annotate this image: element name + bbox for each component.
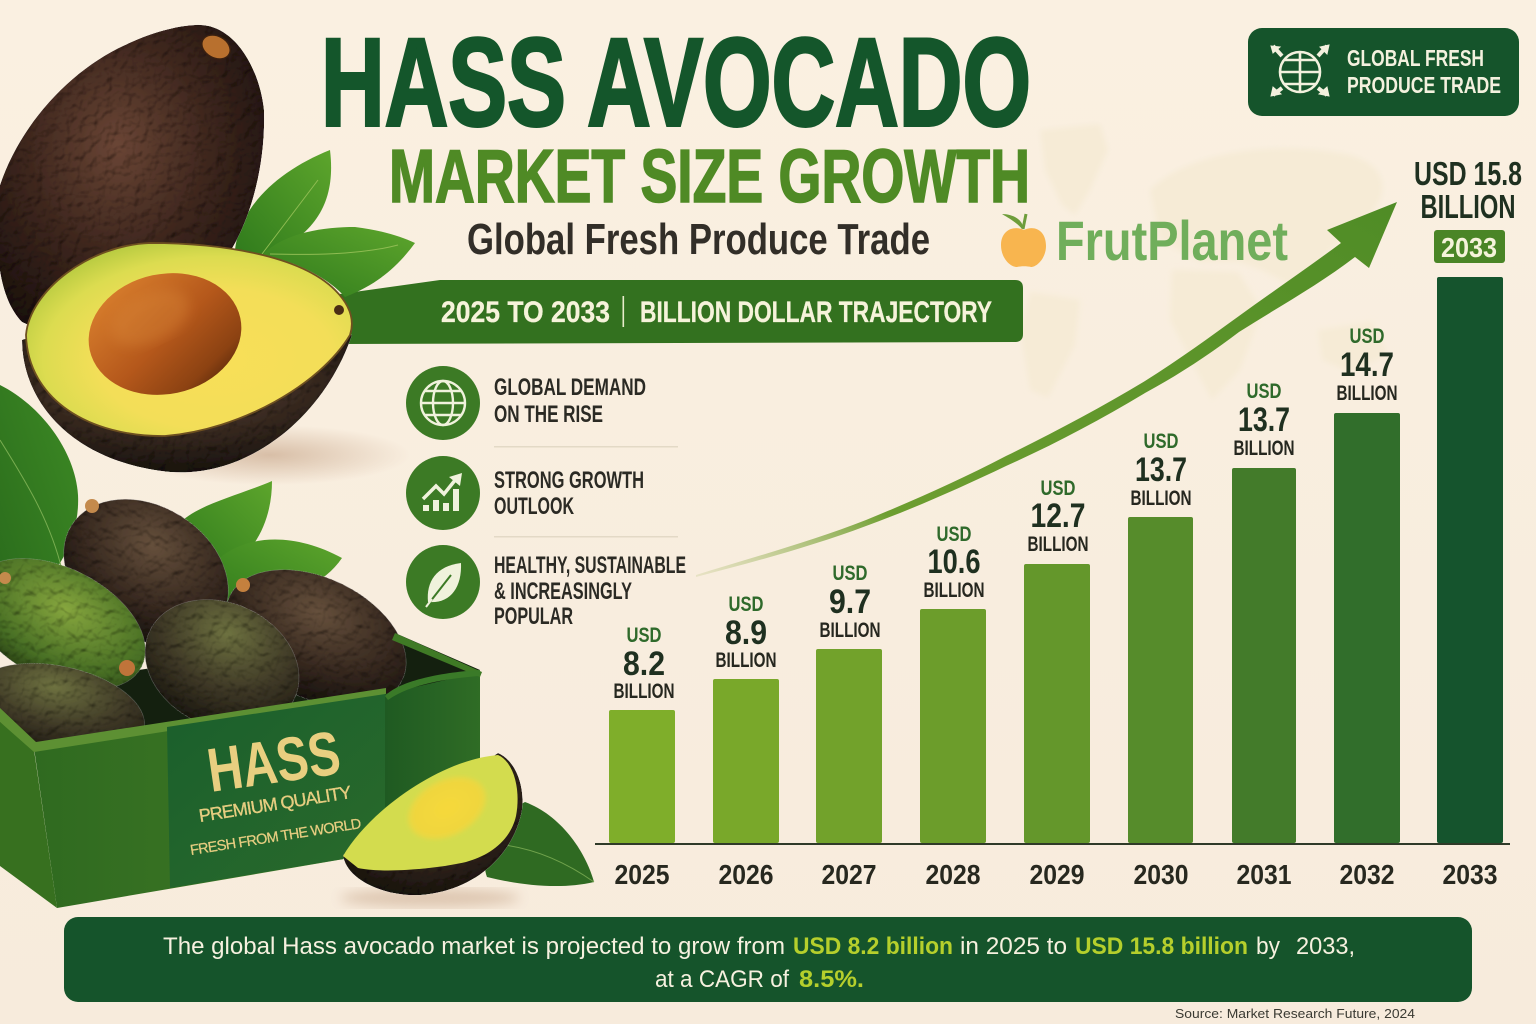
summary text: 2033, — [1296, 933, 1355, 960]
feature text: & INCREASINGLY — [494, 578, 632, 605]
world map watermark — [1020, 124, 1388, 400]
value: 2030: 13.7 — [1135, 451, 1187, 489]
crate rim — [0, 688, 386, 752]
crate right face — [385, 672, 480, 860]
avocado: halved with pit — [22, 243, 352, 472]
feature list — [406, 366, 686, 630]
flesh — [26, 243, 352, 436]
value: 2027 — [820, 562, 880, 642]
floor shadow under half avocado — [130, 425, 410, 485]
wedge skin — [343, 753, 523, 895]
value: 2032: 14.7 — [1340, 346, 1394, 384]
summary text: The global Hass avocado market is projected to grow from — [163, 933, 785, 960]
summary text: USD 15.8 billion — [1075, 933, 1248, 960]
value: 2025: BILLION — [614, 680, 674, 703]
value: 2029 — [1028, 477, 1088, 556]
logo wordmark: FrutPlanet — [1056, 209, 1288, 272]
crate — [0, 633, 482, 908]
badge: global fresh produce trade — [1248, 28, 1519, 116]
wedge flesh — [343, 755, 518, 870]
year labels: 2028 — [926, 859, 980, 890]
avocado: wedge — [340, 753, 523, 907]
value: 2031: 13.7 — [1238, 401, 1290, 439]
feature: strong growth — [406, 456, 644, 530]
feature: healthy sustainable — [406, 545, 686, 630]
value: 2030: USD — [1144, 430, 1178, 453]
skin — [22, 332, 352, 472]
avocado: bottom left — [0, 649, 153, 771]
avocados in crate — [0, 469, 429, 771]
tagline: Global Fresh Produce Trade — [467, 215, 930, 264]
value: 2029: BILLION — [1028, 533, 1088, 556]
crate label panel — [167, 694, 385, 888]
wedge cavity — [397, 764, 497, 852]
value: 2031: USD — [1246, 380, 1282, 403]
small leaf beside wedge — [485, 802, 594, 886]
value: 2025: 8.2 — [623, 645, 665, 683]
value: 2026: USD — [728, 593, 764, 616]
avocado stem — [198, 30, 234, 64]
feature text — [494, 467, 644, 520]
feature text: POPULAR — [494, 603, 573, 630]
feature text: ON THE RISE — [494, 401, 603, 428]
value: 2033 — [1414, 155, 1522, 263]
avocado: right dark — [203, 542, 429, 734]
value: 2033: 2033 — [1441, 232, 1497, 263]
year labels: 2031 — [1236, 859, 1292, 890]
title: HASS AVOCADO — [321, 14, 1031, 152]
value: 2031: BILLION — [1234, 437, 1294, 460]
value: 2028 — [924, 523, 984, 602]
banner date range: 2025 TO 2033 — [441, 296, 610, 329]
value: 2028: 10.6 — [928, 543, 980, 581]
feature text: GLOBAL DEMAND — [494, 374, 646, 401]
badge text — [1347, 45, 1501, 98]
value: 2027: USD — [832, 562, 868, 585]
value: 2028: BILLION — [924, 579, 984, 602]
feature text — [494, 374, 646, 428]
avocado: front olive — [123, 575, 321, 755]
summary text: 8.5%. — [799, 966, 864, 993]
crate text: premium quality: PREMIUM QUALITY — [197, 782, 353, 826]
arrow: growth trajectory — [696, 202, 1397, 577]
summary panel — [64, 917, 1472, 1002]
logo: FrutPlanet — [1001, 209, 1288, 272]
leaves behind big avocado — [235, 150, 415, 297]
icon: apple — [1001, 214, 1046, 267]
badge text: GLOBAL FRESH — [1347, 45, 1484, 71]
value: 2032: BILLION — [1336, 382, 1398, 405]
crate left face — [0, 722, 57, 908]
summary text: USD 8.2 billion — [793, 933, 953, 960]
icon: leaf — [426, 563, 461, 607]
year labels: 2027 — [822, 859, 876, 890]
summary text: in 2025 to — [960, 933, 1067, 960]
value: 2027: 9.7 — [829, 583, 871, 621]
feature: global demand — [406, 366, 646, 440]
crate text: fresh from the world: FRESH FROM THE WORLD — [189, 816, 362, 859]
value: 2030: BILLION — [1130, 487, 1192, 510]
value: 2032 — [1336, 325, 1398, 405]
crate brand: HASS: HASS — [203, 719, 345, 806]
pit — [77, 259, 253, 409]
summary text: at a CAGR of — [655, 966, 789, 993]
value: 2029: USD — [1040, 477, 1076, 500]
icon: globe with arrows — [1271, 45, 1329, 96]
value: 2026: BILLION — [716, 649, 776, 672]
value: 2030 — [1130, 430, 1192, 510]
value: 2025: USD — [626, 624, 662, 647]
year labels: 2033 — [1442, 859, 1498, 890]
icon: globe — [421, 381, 465, 425]
crate interior shadow — [0, 633, 480, 750]
leaf: large left — [0, 385, 78, 612]
feature text: STRONG GROWTH — [494, 467, 644, 494]
year labels: 2025 — [614, 859, 670, 890]
avocado: left green — [0, 531, 167, 717]
summary text: by — [1256, 933, 1280, 960]
value: 2029: 12.7 — [1030, 497, 1086, 535]
bars — [609, 277, 1503, 843]
value: 2032: USD — [1350, 325, 1384, 348]
value: 2026 — [716, 593, 776, 672]
year labels: 2032 — [1340, 859, 1394, 890]
value: 2028: USD — [936, 523, 972, 546]
feature text — [494, 552, 686, 630]
bar chart — [595, 155, 1522, 890]
source note: Source: Market Research Future, 2024 — [1175, 1006, 1415, 1021]
year labels: 2030 — [1134, 859, 1188, 890]
summary text — [163, 933, 1355, 993]
banner label: BILLION DOLLAR TRAJECTORY — [640, 296, 992, 329]
subtitle: market size growth: MARKET SIZE GROWTH — [389, 134, 1030, 218]
feature text: OUTLOOK — [494, 493, 574, 520]
value: 2027: BILLION — [820, 619, 880, 642]
value: 2031 — [1234, 380, 1294, 460]
value: 2026: 8.9 — [725, 614, 767, 652]
crate front face — [34, 694, 385, 908]
banner: 2025 to 2033 — [340, 280, 1023, 344]
year labels: 2029 — [1030, 859, 1084, 890]
leaves behind crate — [178, 481, 342, 612]
avocado: whole dark — [0, 25, 264, 340]
value: 2025 — [614, 624, 674, 703]
icon: growth chart — [423, 473, 462, 511]
year labels — [614, 859, 1498, 890]
year labels: 2026 — [718, 859, 774, 890]
avocado: back dark — [36, 469, 256, 675]
feature text: HEALTHY, SUSTAINABLE — [494, 552, 686, 579]
